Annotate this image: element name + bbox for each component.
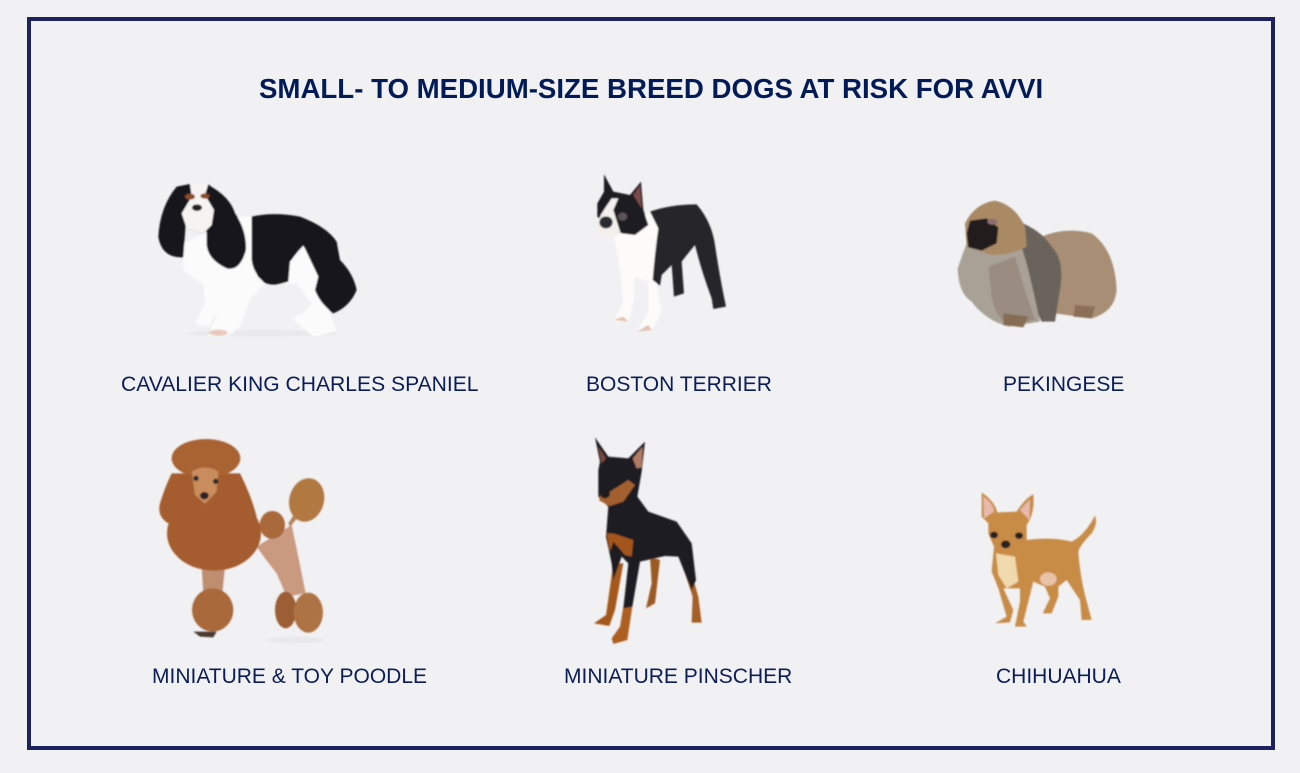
label: chihuahua: CHIHUAHUA xyxy=(996,665,1121,688)
icon: cavalier king charles spaniel xyxy=(158,184,357,337)
icon: miniature and toy poodle xyxy=(159,439,329,643)
icon: pekingese xyxy=(958,201,1117,327)
icon: miniature pinscher xyxy=(594,437,702,644)
label: miniature pinscher: MINIATURE PINSCHER xyxy=(564,665,792,688)
icon: chihuahua xyxy=(982,492,1096,627)
label: miniature and toy poodle: MINIATURE & TOY POODLE xyxy=(152,665,427,688)
label: pekingese: PEKINGESE xyxy=(1003,373,1124,396)
icon: boston terrier xyxy=(597,174,726,332)
title: SMALL- TO MEDIUM-SIZE BREED DOGS AT RISK FOR AVVI xyxy=(259,73,1043,104)
label: boston terrier: BOSTON TERRIER xyxy=(586,373,772,396)
label: cavalier king charles spaniel: CAVALIER KING CHARLES SPANIEL xyxy=(121,373,479,396)
